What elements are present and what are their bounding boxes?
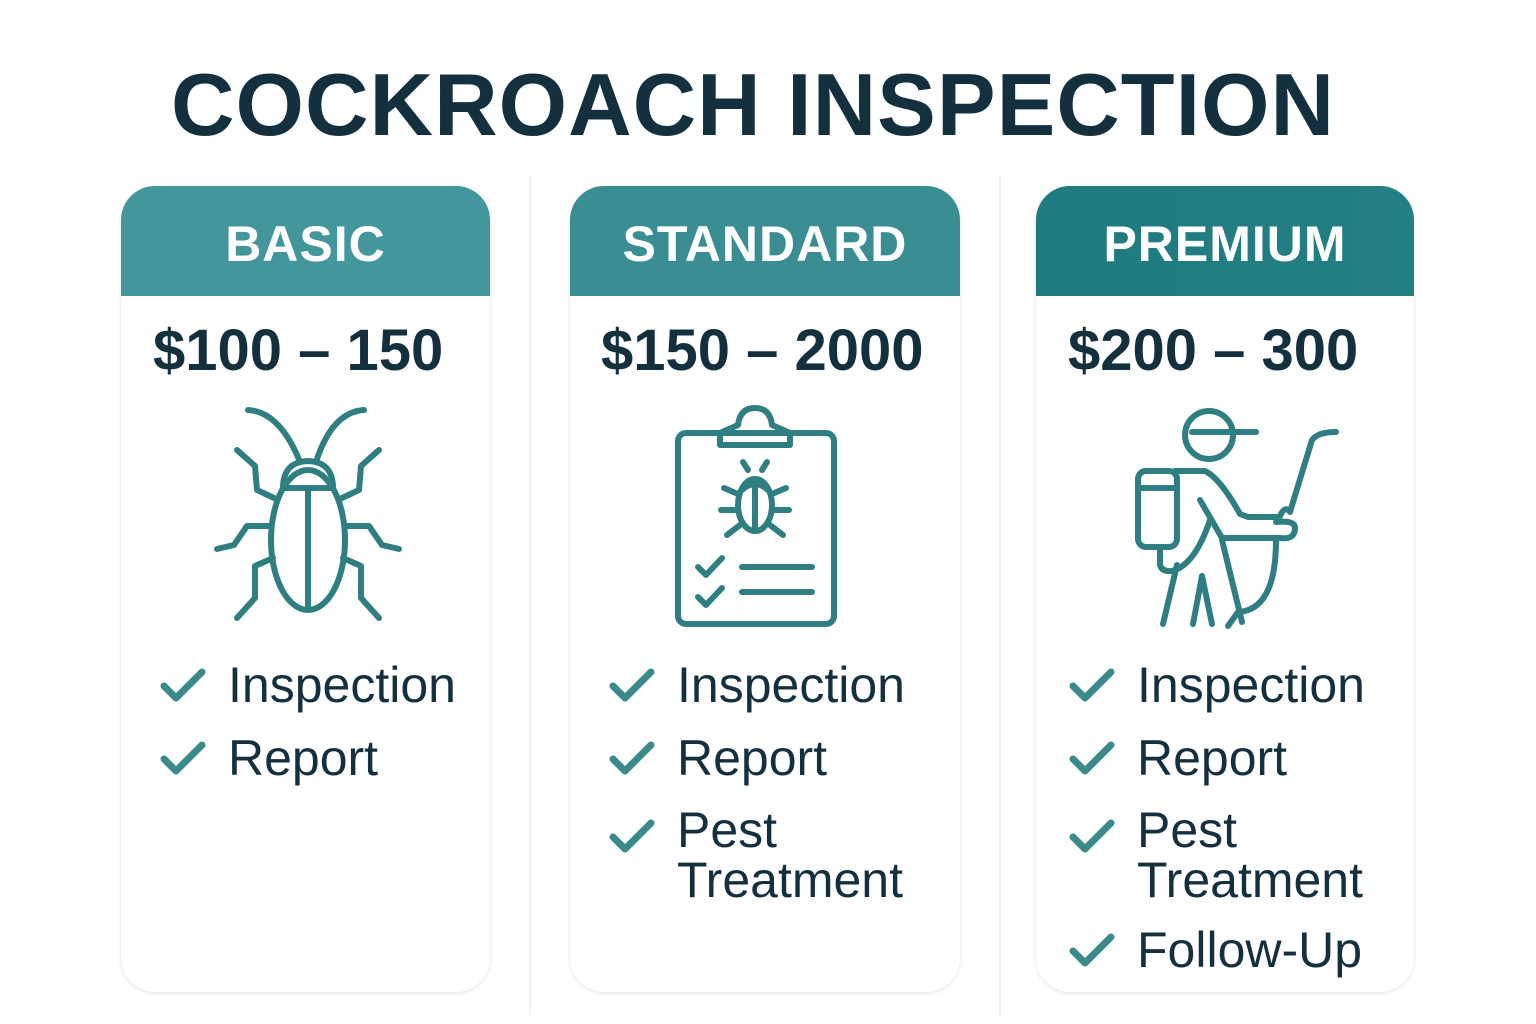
feature: pest treatment: Treatment	[1137, 852, 1363, 908]
feature: inspection: Inspection	[677, 657, 905, 713]
feature: pest treatment	[1070, 802, 1363, 908]
feature: report	[160, 730, 378, 786]
price: premium: $200 – 300	[1068, 318, 1358, 383]
feature: report	[610, 730, 827, 786]
price: standard: $150 – 2000	[601, 318, 924, 383]
header: premium	[1036, 186, 1414, 296]
feature: pest treatment: Pest	[1137, 802, 1237, 858]
header: standard: STANDARD	[623, 216, 907, 272]
feature: follow-up: Follow-Up	[1137, 922, 1362, 978]
feature: report: Report	[677, 730, 827, 786]
feature: pest treatment: Treatment	[677, 852, 903, 908]
feature: report: Report	[1137, 730, 1287, 786]
feature: inspection: Inspection	[228, 657, 456, 713]
header: basic	[121, 186, 490, 296]
feature: pest treatment: Pest	[677, 802, 777, 858]
header: premium: PREMIUM	[1103, 216, 1347, 272]
panel: basic	[121, 186, 490, 992]
feature: report: Report	[228, 730, 378, 786]
header: standard	[570, 186, 960, 296]
icon: clipboard report	[678, 408, 834, 624]
panel: premium	[1036, 186, 1414, 992]
icon: cockroach	[217, 410, 399, 618]
icon: exterminator	[1138, 411, 1336, 626]
price: basic: $100 – 150	[153, 318, 443, 383]
panel: standard	[570, 186, 960, 992]
title: COCKROACH INSPECTION	[171, 55, 1335, 154]
header: basic: BASIC	[225, 216, 386, 272]
feature: pest treatment	[610, 802, 903, 908]
feature: inspection: Inspection	[1137, 657, 1365, 713]
feature: report	[1070, 730, 1287, 786]
